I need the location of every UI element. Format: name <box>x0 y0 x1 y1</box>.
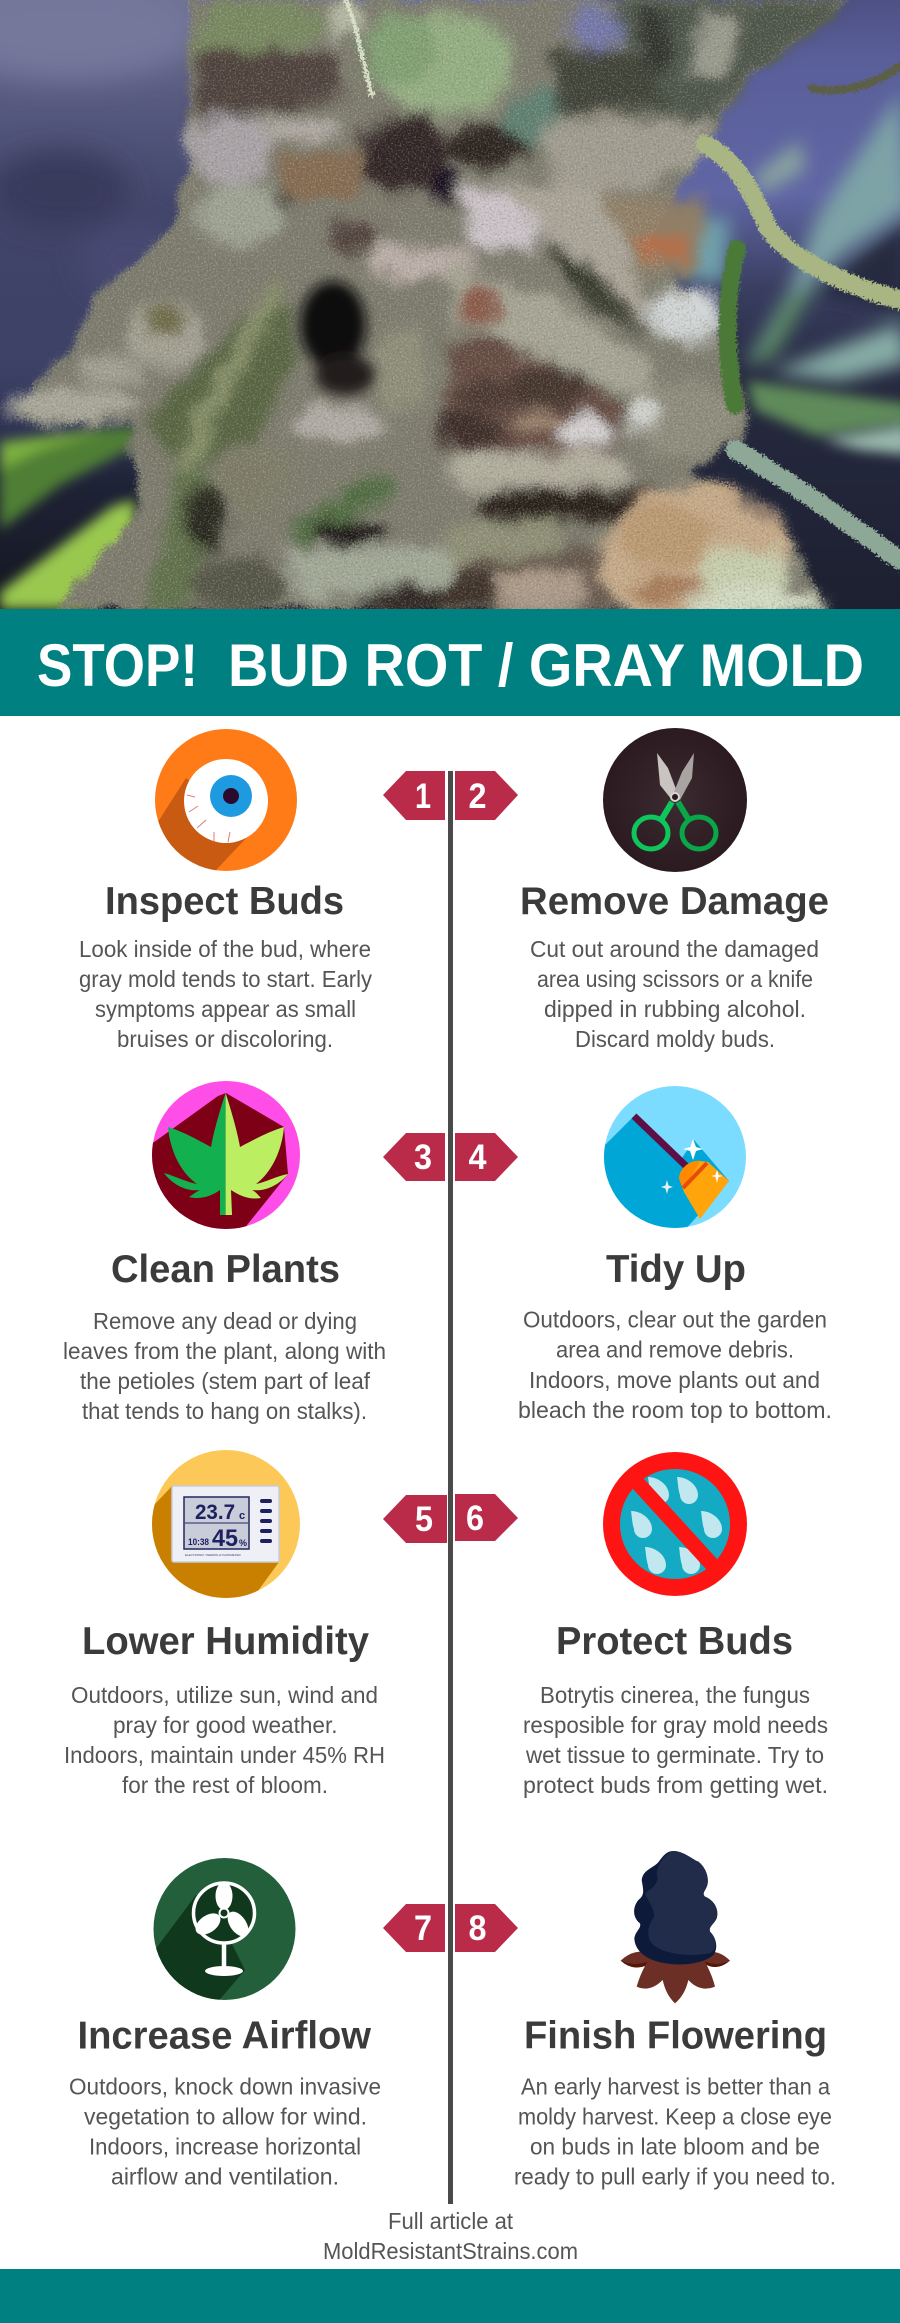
badge 3 <box>383 1133 445 1181</box>
badge 1 <box>383 771 445 820</box>
icon: fan <box>154 1858 296 2000</box>
text block: Indoors, maintain under 45% RH <box>64 1742 385 1768</box>
heading: Inspect Buds <box>105 880 344 923</box>
text block: symptoms appear as small <box>95 996 356 1022</box>
badge 5: 5 <box>415 1500 433 1539</box>
text block <box>64 1682 385 1798</box>
badge 2 <box>455 771 518 820</box>
icon: eye <box>155 729 297 871</box>
icon: hygrometer <box>152 1450 300 1598</box>
heading: Clean Plants <box>111 1248 340 1291</box>
step 6: protect buds <box>455 1452 828 1798</box>
badge 6 <box>455 1494 518 1541</box>
title banner: STOP! <box>37 632 198 699</box>
text block: that tends to hang on stalks). <box>82 1398 367 1424</box>
footer band <box>0 2269 900 2323</box>
black cavity <box>300 281 375 395</box>
heading: Increase Airflow <box>78 2014 372 2058</box>
badge 1: 1 <box>415 777 431 816</box>
central timeline line <box>448 771 453 2204</box>
icon: hygrometer: c <box>239 1510 245 1522</box>
text block: resposible for gray mold needs <box>523 1712 828 1738</box>
text block: An early harvest is better than a <box>521 2074 831 2100</box>
heading: Protect Buds <box>556 1620 793 1663</box>
text block: Indoors, move plants out and <box>529 1367 820 1393</box>
icon: bud <box>621 1851 730 2003</box>
text block <box>69 2074 381 2190</box>
text block <box>530 936 819 1052</box>
text block: Outdoors, clear out the garden <box>523 1306 827 1332</box>
footer credit text <box>323 2208 578 2264</box>
text block <box>514 2074 836 2190</box>
icon: hygrometer: 10:38 <box>188 1537 209 1547</box>
text block: Botrytis cinerea, the fungus <box>540 1682 810 1708</box>
lower right bud <box>600 484 825 636</box>
step 1: inspect buds <box>79 729 445 1052</box>
text block: Look inside of the bud, where <box>79 936 371 962</box>
heading: Finish Flowering <box>524 2014 827 2058</box>
icon: no water drops <box>603 1452 747 1596</box>
text block: Outdoors, utilize sun, wind and <box>71 1682 378 1708</box>
text block: area and remove debris. <box>556 1336 794 1362</box>
badge 8: 8 <box>468 1909 486 1948</box>
background right side <box>0 0 900 609</box>
badge 5 <box>383 1495 447 1543</box>
text block <box>63 1308 386 1424</box>
badge 8 <box>455 1904 518 1952</box>
badge 6: 6 <box>466 1499 484 1538</box>
heading: Remove Damage <box>520 880 829 923</box>
text block <box>79 936 372 1052</box>
text block: for the rest of bloom. <box>122 1772 328 1798</box>
icon: hygrometer: % <box>239 1538 247 1548</box>
text block: bleach the room top to bottom. <box>518 1397 832 1423</box>
step 5: lower humidity <box>64 1450 447 1798</box>
icon: hygrometer: 23.7 <box>195 1501 235 1524</box>
text block <box>518 1306 832 1423</box>
text block <box>523 1682 828 1798</box>
icon: scissors <box>603 728 747 872</box>
step 8: finish flowering <box>455 1851 836 2190</box>
step 3: clean plants <box>63 1081 445 1424</box>
text block: area using scissors or a knife <box>537 966 813 992</box>
badge 7 <box>383 1904 445 1952</box>
footer credit text: Full article at <box>388 2208 513 2234</box>
text block: leaves from the plant, along with <box>63 1338 386 1364</box>
step 7: increase airflow <box>69 1858 445 2190</box>
text block: vegetation to allow for wind. <box>84 2104 367 2130</box>
text block: bruises or discoloring. <box>117 1026 333 1052</box>
text block: moldy harvest. Keep a close eye <box>518 2104 832 2130</box>
heading: Lower Humidity <box>82 1620 370 1663</box>
stems and small leaves <box>345 0 900 560</box>
badge 7: 7 <box>414 1909 432 1948</box>
bud mass with fuzzy edges <box>10 0 850 636</box>
hero photo: moldy bud <box>0 0 900 636</box>
footer credit text: MoldResistantStrains.com <box>323 2238 578 2264</box>
icon: hygrometer: ELECTRONIC THERMO-HYGROMETER <box>185 1553 241 1557</box>
text block: on buds in late bloom and be <box>530 2134 820 2160</box>
badge 4 <box>455 1133 518 1181</box>
icon: cannabis leaf <box>152 1081 300 1229</box>
text block: the petioles (stem part of leaf <box>80 1368 370 1394</box>
badge 4: 4 <box>468 1138 487 1177</box>
text block: Indoors, increase horizontal <box>89 2134 361 2160</box>
text block: Outdoors, knock down invasive <box>69 2074 381 2100</box>
step 2: remove damage <box>455 728 829 1052</box>
badge 3: 3 <box>414 1138 432 1177</box>
title banner <box>0 609 900 716</box>
text block: protect buds from getting wet. <box>523 1772 828 1798</box>
text block: Discard moldy buds. <box>575 1026 775 1052</box>
icon: hygrometer: 45 <box>212 1525 238 1552</box>
text block: pray for good weather. <box>113 1712 338 1738</box>
heading: Tidy Up <box>606 1248 746 1291</box>
icon: broom <box>604 1086 746 1228</box>
text block: ready to pull early if you need to. <box>514 2164 836 2190</box>
text block: gray mold tends to start. Early <box>79 966 372 992</box>
title banner: BUD ROT / GRAY MOLD <box>228 632 864 699</box>
step 4: tidy up <box>455 1086 832 1423</box>
text block: wet tissue to germinate. Try to <box>525 1742 824 1768</box>
text block: airflow and ventilation. <box>111 2164 339 2190</box>
noise texture <box>0 0 900 609</box>
text block: Remove any dead or dying <box>93 1308 357 1334</box>
text block: Cut out around the damaged <box>530 936 819 962</box>
text block: dipped in rubbing alcohol. <box>544 996 806 1022</box>
badge 2: 2 <box>468 777 486 816</box>
